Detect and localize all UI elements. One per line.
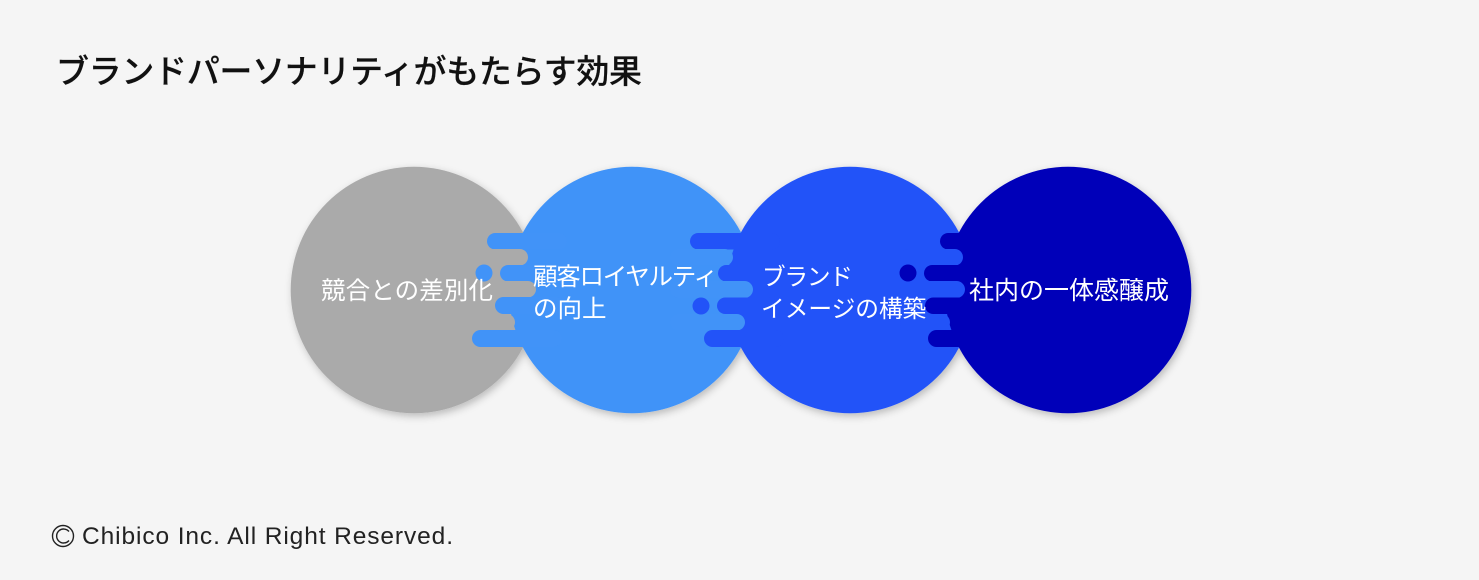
icon: copyright mark: [52, 526, 74, 546]
label: brand image: イメージの構築: [761, 296, 926, 323]
circle: light blue: [509, 167, 755, 413]
interlocking fingers: blue and navy: [900, 233, 1000, 347]
label: differentiation: 競合との差別化: [321, 277, 493, 305]
diagram: four connected circles: [291, 167, 1191, 413]
label: brand image: ブランド: [762, 264, 853, 291]
label: internal unity: 社内の一体感醸成: [969, 277, 1169, 305]
circles with shadow: [291, 167, 1191, 413]
interlocking fingers: gray and light blue: [460, 233, 570, 347]
title: ブランドパーソナリティがもたらす効果: [56, 45, 642, 93]
footer copyright: [52, 523, 453, 550]
label: brand image: [761, 264, 926, 323]
circle: blue: [727, 167, 973, 413]
copyright text: Chibico Inc. All Right Reserved.: [82, 523, 453, 550]
circle: navy: [945, 167, 1191, 413]
interlocking fingers: light blue and blue: [670, 233, 784, 347]
circle: gray: [291, 167, 537, 413]
label: customer loyalty: [533, 263, 718, 323]
label: customer loyalty: 顧客ロイヤルティ: [533, 263, 718, 291]
label: customer loyalty: の向上: [533, 295, 606, 323]
